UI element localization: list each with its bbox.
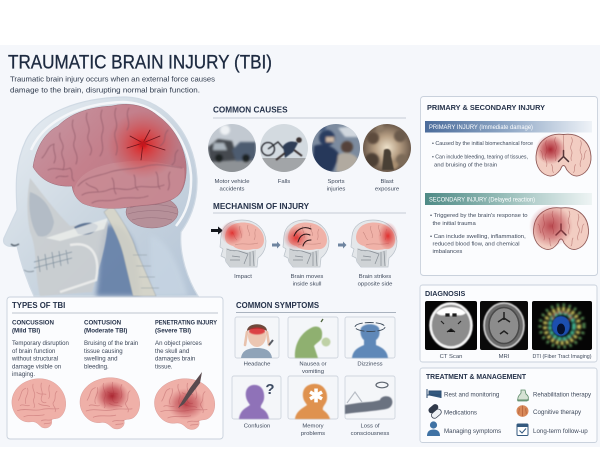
- column: contusion: [80, 320, 140, 429]
- cause labels: accidents: [220, 186, 244, 192]
- lighter temporal lobe: [74, 161, 185, 208]
- scan labels: MRI: [499, 354, 510, 360]
- symptom labels: vomiting: [302, 369, 324, 375]
- cerebrum: [33, 104, 186, 208]
- step: brain moves: [283, 220, 329, 267]
- photo: sports injuries: [312, 124, 360, 172]
- subtitle: Traumatic brain injury occurs when an external force causes: [10, 74, 215, 84]
- column: penetrating injury: PENETRATING INJURY: [155, 320, 218, 326]
- scan labels: [440, 354, 592, 360]
- column: concussion: imaging.: [12, 371, 35, 378]
- illustration: transparent head with injured brain: [4, 97, 198, 296]
- column: penetrating injury: tissue.: [155, 364, 173, 370]
- subtitle: [10, 74, 215, 94]
- column: penetrating injury: damages brain: [155, 356, 195, 362]
- band: primary: PRIMARY INJURY (Immediate damage): [429, 125, 533, 131]
- mechanism labels: Impact: [234, 274, 252, 280]
- band: secondary: SECONDARY INJURY (Delayed reaction): [429, 198, 535, 204]
- bullets: secondary: reduced blood flow, and chemical: [432, 242, 520, 248]
- scan labels: CT Scan: [440, 354, 462, 360]
- symptom: loss of consciousness: [345, 376, 395, 419]
- arrow: [338, 242, 346, 248]
- cerebellum: [126, 196, 178, 228]
- bullets: primary: • Caused by the initial biomechanical force: [432, 141, 534, 147]
- symptom: confusion: [232, 376, 281, 419]
- mechanism labels: Brain moves: [291, 274, 323, 280]
- section: common symptoms: [232, 301, 396, 437]
- bullets: secondary: • Can include swelling, inflammation,: [430, 234, 526, 240]
- photo: motor vehicle accidents: [208, 124, 256, 172]
- symptom labels: problems: [301, 431, 325, 437]
- scan: DTI: [532, 301, 592, 350]
- mechanism labels: opposite side: [358, 282, 393, 288]
- item: rest and monitoring: Rest and monitoring: [444, 392, 500, 398]
- symptom labels: Confusion: [244, 424, 270, 430]
- symptom labels: Headache: [244, 362, 271, 368]
- heading: COMMON CAUSES: [213, 106, 288, 114]
- deep neck shadow: [96, 225, 140, 296]
- column: penetrating injury: (Severe TBI): [155, 328, 191, 334]
- symptom labels: [244, 362, 389, 437]
- cause labels: Falls: [278, 179, 290, 185]
- column: contusion: (Moderate TBI): [84, 328, 127, 334]
- symptom: headache: [235, 317, 279, 358]
- panel: types of TBI: [7, 297, 223, 439]
- column: concussion: damage visible on: [12, 364, 61, 370]
- symptom labels: Dizziness: [357, 362, 383, 368]
- item: long-term follow-up: Long-term follow-up: [533, 428, 588, 435]
- red impact glow: [107, 111, 179, 179]
- icon: penetrating object: [178, 372, 202, 408]
- item: long-term follow-up: [517, 424, 588, 436]
- head silhouette: [4, 97, 198, 296]
- symptom: nausea: [288, 317, 338, 358]
- scan: MRI: [480, 301, 528, 350]
- column: penetrating injury: An object pierces: [155, 340, 202, 347]
- skull shell: [31, 102, 191, 226]
- band: primary: [425, 121, 592, 132]
- heading: TREATMENT & MANAGEMENT: [426, 372, 526, 381]
- column: contusion: swelling and: [84, 356, 118, 362]
- title: TRAUMATIC BRAIN INJURY (TBI): [8, 52, 272, 74]
- item: rehabilitation therapy: Rehabilitation therapy: [533, 392, 592, 398]
- heading: DIAGNOSIS: [425, 289, 466, 298]
- gyri folds: [42, 108, 182, 203]
- bullets: secondary: the initial trauma: [432, 221, 476, 227]
- scan labels: DTI (Fiber Tract Imaging): [532, 354, 592, 360]
- item: managing symptoms: Managing symptoms: [444, 428, 501, 435]
- band: secondary: [425, 193, 592, 205]
- cause labels: injuries: [327, 186, 345, 192]
- mechanism labels: inside skull: [293, 282, 321, 288]
- section: common causes: [208, 106, 411, 192]
- mechanism labels: Brain strikes: [359, 274, 391, 280]
- item: managing symptoms: [427, 421, 501, 436]
- symptom: memory problems: ✱: [308, 386, 324, 406]
- scan: CT: [425, 301, 477, 350]
- bullets: secondary: imbalances: [432, 249, 462, 255]
- cause labels: exposure: [375, 186, 400, 192]
- item: rest and monitoring: [427, 389, 500, 398]
- bullets: primary: and bruising of the brain: [434, 162, 497, 168]
- panel: primary and secondary injury: [420, 96, 598, 276]
- symptom: confusion: ?: [265, 381, 275, 398]
- heading: COMMON SYMPTOMS: [236, 301, 319, 310]
- subtitle: damage to the brain, disrupting normal brain function.: [10, 86, 200, 94]
- column: concussion: without structural: [11, 356, 58, 362]
- item: medications: Medications: [444, 410, 477, 416]
- item: medications: [427, 403, 477, 420]
- bullets: secondary: • Triggered by the brain's response to: [430, 213, 528, 219]
- item: cognitive therapy: [516, 405, 582, 417]
- symptom: memory problems: [288, 376, 338, 419]
- symptom labels: Memory: [302, 424, 324, 430]
- column: contusion: bleeding.: [84, 364, 109, 370]
- column: concussion: (Mild TBI): [12, 328, 40, 334]
- cause labels: Sports: [327, 179, 345, 185]
- cause labels: [214, 179, 400, 192]
- heading: TYPES OF TBI: [12, 301, 65, 310]
- step: opposite side: [351, 220, 398, 267]
- item: rehabilitation therapy: [517, 390, 592, 401]
- photo: falls: [260, 124, 308, 172]
- spine: [104, 205, 159, 296]
- column: concussion: CONCUSSION: [12, 320, 54, 326]
- heading: MECHANISM OF INJURY: [213, 202, 310, 211]
- item: cognitive therapy: Cognitive therapy: [533, 409, 582, 416]
- bullets: primary: [432, 141, 534, 168]
- column: contusion: tissue causing: [84, 348, 123, 355]
- symptom labels: consciousness: [351, 431, 389, 437]
- symptom labels: Nausea or: [299, 362, 327, 368]
- column: contusion: CONTUSION: [84, 320, 122, 326]
- section: mechanism of injury: [211, 202, 406, 288]
- icon: impact arrow: [211, 226, 223, 234]
- symptom: dizziness: [345, 317, 395, 358]
- panel: treatment and management: [420, 368, 597, 442]
- symptom labels: Loss of: [360, 424, 380, 430]
- column: concussion: [11, 320, 69, 428]
- column: penetrating injury: [154, 320, 218, 429]
- cause labels: Motor vehicle: [214, 179, 250, 185]
- cause labels: Blast: [380, 179, 394, 185]
- fracture lines at impact: [127, 130, 165, 160]
- heading: PRIMARY & SECONDARY INJURY: [427, 103, 545, 112]
- photo: blast exposure: [363, 124, 411, 172]
- brain: secondary damage: [529, 205, 589, 250]
- arrow: [272, 242, 280, 248]
- mechanism labels: [234, 274, 393, 288]
- brain: primary damage: [536, 134, 591, 176]
- column: concussion: Temporary disruption: [12, 340, 69, 347]
- column: penetrating injury: the skull and: [155, 348, 189, 355]
- step: impact: [220, 220, 266, 267]
- column: concussion: of brain function: [12, 348, 55, 355]
- bullets: secondary: [430, 213, 528, 255]
- column: contusion: Bruising of the brain: [84, 340, 138, 347]
- skull and face bones: [11, 178, 108, 296]
- panel: diagnosis: [420, 285, 597, 362]
- bullets: primary: • Can include bleeding, tearing of tissues,: [432, 154, 528, 160]
